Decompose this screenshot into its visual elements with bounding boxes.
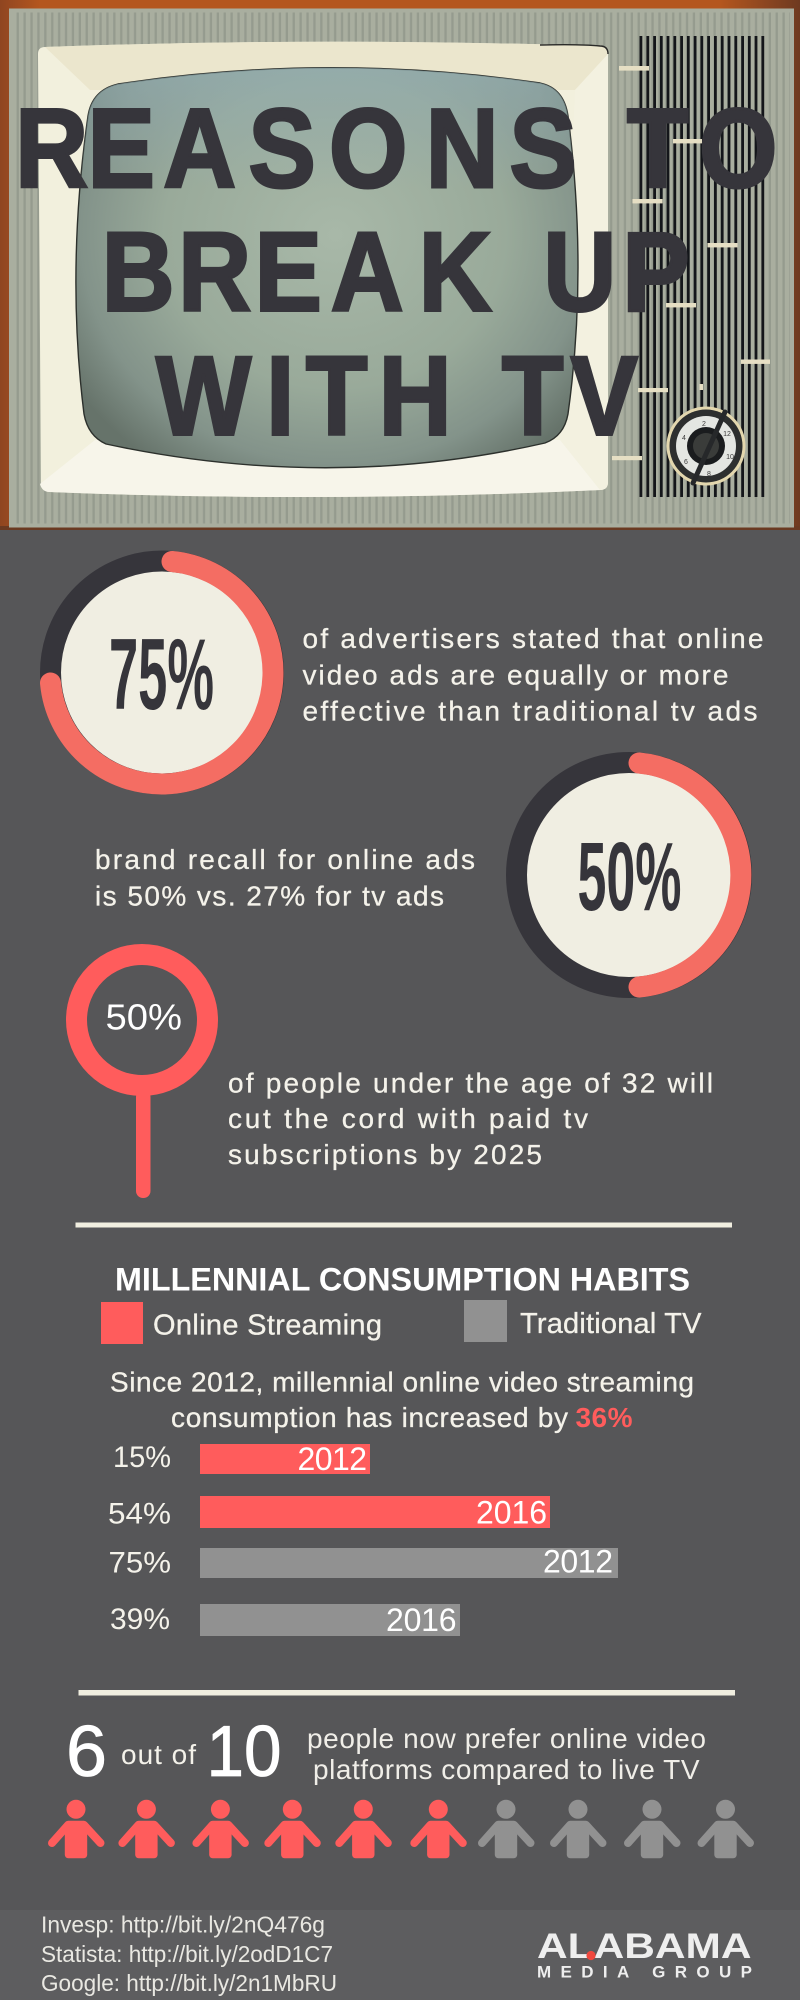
text: sources: Invesp: http://bit.ly/2nQ476g [41, 1912, 325, 1938]
legend: Traditional TV [520, 1308, 702, 1340]
title: BREAK UP [102, 210, 690, 335]
donut chart: 50%: 50% [578, 822, 682, 931]
speaker grille [640, 36, 764, 497]
text: advertisers: effective than traditional tv ads [302, 696, 758, 726]
text: cut the cord: subscriptions by 2025 [228, 1139, 542, 1170]
bar: tv 2012 75%: 75% [108, 1546, 171, 1580]
logo: Alabama Media Group: ALABAMA [537, 1927, 752, 1966]
panel: footer [0, 1910, 800, 2000]
speaker tabs [612, 66, 770, 460]
logo: Alabama Media Group: MEDIA GROUP [537, 1962, 752, 1982]
donut chart: 50% [516, 762, 742, 988]
bar: online 2012 15%: 2012 [298, 1441, 367, 1477]
bar: tv 2012 75% [108, 1544, 618, 1580]
callout: 6 out of 10: out of [121, 1739, 196, 1770]
text: cut the cord [228, 1068, 713, 1170]
bar: online 2016 54%: 2016 [476, 1494, 547, 1530]
icon: tuning knob: 12 [723, 431, 731, 438]
logo: Alabama Media Group [537, 1927, 752, 1982]
bar: online 2016 54% [108, 1494, 550, 1530]
panel: 75% of advertisers stat [50, 561, 764, 784]
title [15, 86, 777, 459]
pictogram: 6 of 10 people [52, 1800, 750, 1858]
bar: tv 2016 39% [110, 1602, 460, 1638]
bar: tv 2016 39%: 39% [110, 1603, 170, 1636]
bar: online 2012 15%: 15% [113, 1441, 171, 1474]
text: sources: Google: http://bit.ly/2n1MbRU [41, 1970, 337, 1996]
bar: tv 2012 75%: 2012 [543, 1544, 613, 1580]
text: streaming increase: consumption has increased by [171, 1402, 568, 1433]
icon: pin marker with 50%: 50% [106, 996, 182, 1038]
donut chart: 75%: 75% [109, 619, 214, 731]
text: brand recall: is 50% vs. 27% for tv ads [95, 880, 444, 912]
callout: 6 out of 10: 10 [206, 1712, 282, 1792]
text: sources: Statista: http://bit.ly/2odD1C7 [41, 1941, 333, 1967]
cream bezel [38, 42, 608, 497]
text: advertisers [302, 623, 764, 726]
legend: Online Streaming [153, 1310, 382, 1342]
text: prefer online video: people now prefer online video [307, 1723, 706, 1754]
icon: tuning knob: 4 [682, 435, 686, 442]
text: sources [41, 1912, 337, 1996]
text: streaming increase: 36% [576, 1402, 633, 1433]
callout: 6 out of 10: 6 [66, 1712, 107, 1792]
icon: pin marker with 50% [76, 954, 208, 1198]
bar: online 2012 15% [113, 1441, 370, 1477]
callout: 6 out of 10 [66, 1712, 282, 1792]
icon: tuning knob: 8 [707, 471, 711, 478]
panel: television photo header [0, 0, 800, 530]
heading: millennial consumption habits: MILLENNIAL CONSUMPTION HABITS [115, 1262, 690, 1298]
wood cabinet [0, 0, 800, 530]
bar: tv 2016 39%: 2016 [386, 1602, 456, 1638]
text: brand recall [95, 844, 475, 912]
ribbed front panel [9, 8, 794, 528]
donut chart: 75% [50, 561, 274, 784]
icon: tuning knob: 2 [702, 421, 706, 428]
text: advertisers: video ads are equally or more [302, 660, 728, 690]
legend [101, 1300, 702, 1344]
text: advertisers: of advertisers stated that online [302, 623, 764, 654]
title: REASONS TO [15, 86, 777, 211]
text: brand recall: brand recall for online ads [95, 844, 475, 875]
panel: 50% brand recall stat [95, 762, 742, 988]
icon: tuning knob: 10 [726, 454, 734, 461]
text: streaming increase [110, 1366, 694, 1433]
bar chart [108, 1441, 618, 1638]
panel: cut the cord stat [76, 954, 713, 1198]
icon: tuning knob: 6 [684, 459, 688, 466]
text: cut the cord: cut the cord with paid tv [228, 1103, 588, 1134]
text: prefer online video: platforms compared to live TV [313, 1754, 700, 1785]
text: cut the cord: of people under the age of 32 will [228, 1068, 713, 1098]
text: prefer online video [307, 1723, 706, 1785]
text: streaming increase: Since 2012, millennial online video streaming [110, 1366, 694, 1398]
title: WITH TV [156, 334, 638, 459]
icon: tuning knob [666, 406, 746, 486]
bar: online 2016 54%: 54% [108, 1498, 171, 1530]
screen [76, 68, 578, 468]
